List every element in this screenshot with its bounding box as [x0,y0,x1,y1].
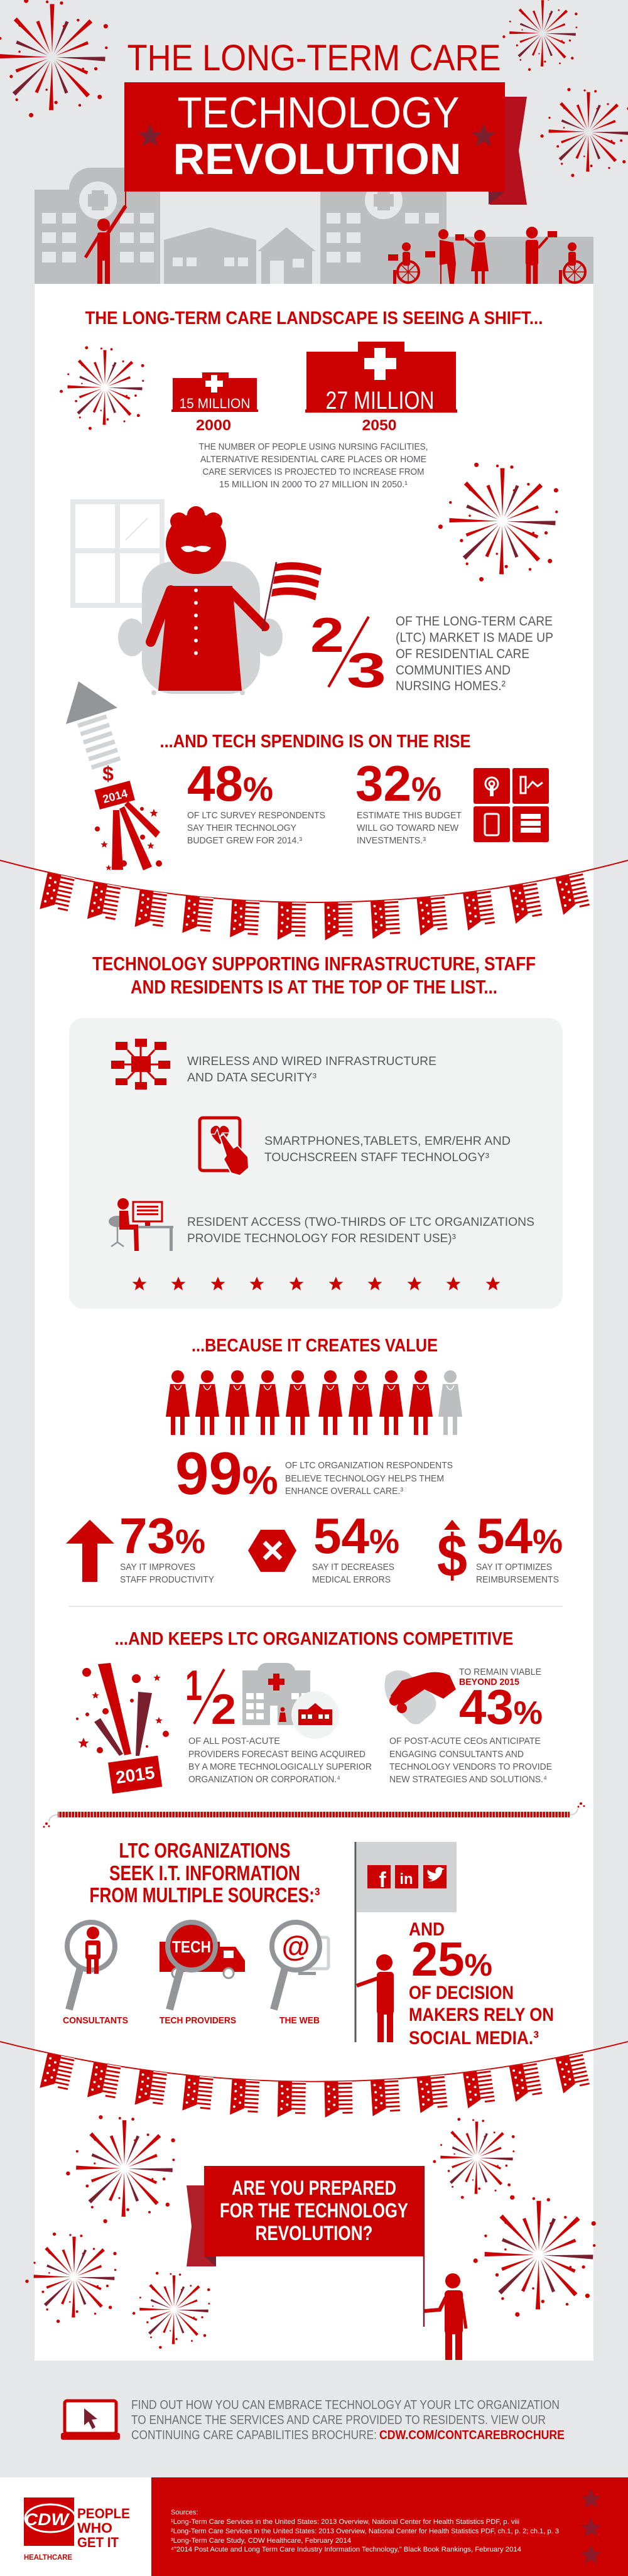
person holding closing banner [424,2166,466,2360]
stat: two thirds: 2 [310,607,344,663]
heading: seek IT information: FROM MULTIPLE SOURCES:³ [89,1883,320,1907]
labels: sources: THE WEB [279,2015,320,2026]
stat: 48%: 48% [187,755,273,811]
text: LTC market share [396,614,553,693]
closing banner tail [187,2185,216,2266]
stat: 48% [187,755,325,846]
stat: 54% reimbursements: SAY IT OPTIMIZES [476,1562,552,1572]
stat: 43% CEOs: OF POST-ACUTE CEOs ANTICIPATE [389,1736,541,1746]
stat: 48%: SAY THEIR TECHNOLOGY [187,823,296,833]
heading: landscape shift: THE LONG-TERM CARE LANDSCAPE IS SEEING A SHIFT... [85,308,543,328]
white content panel [35,284,593,2361]
bunting: top [0,860,628,940]
stat: 32%: INVESTMENTS.³ [357,836,426,846]
title banner [124,82,505,192]
text: nursing facilities projection: 15 MILLION IN 2000 TO 27 MILLION IN 2050.¹ [219,480,408,490]
text: resident access: RESIDENT ACCESS (TWO-THIRDS OF LTC ORGANIZATIONS [187,1216,534,1229]
stat: 32%: ESTIMATE THIS BUDGET [357,811,462,821]
stat: two thirds: 3 [347,642,386,698]
icon: facebook [367,1865,391,1892]
icon: laptop with cursor [61,2401,120,2440]
grandma in armchair with flag [118,506,322,695]
closing banner: are you prepared: ARE YOU PREPARED [232,2177,396,2199]
stat: 43% CEOs: NEW STRATEGIES AND SOLUTIONS.⁴ [389,1774,547,1785]
bunting: bottom [0,2042,628,2118]
stat: one half acquired: 2 [211,1686,236,1733]
text: LTC market share: OF THE LONG-TERM CARE [396,614,553,629]
residents group with flags [388,227,585,284]
heading: seek IT information [89,1839,320,1907]
firework: left of stats [60,346,144,430]
stat: 48%: OF LTC SURVEY RESPONDENTS [187,811,325,821]
stat: two thirds [310,607,386,698]
heading: competitive: ...AND KEEPS LTC ORGANIZATIONS COMPETITIVE [114,1629,514,1649]
stat: 48%: BUDGET GREW FOR 2014.³ [187,836,302,846]
stat: 27 million 2050: 2050 [362,417,397,434]
text: infrastructure [187,1055,436,1085]
icon: rocket 2014: $ [102,762,114,785]
icon: rocket 2014 [66,681,162,870]
text: smartphones: SMARTPHONES,TABLETS, EMR/EHR AND [264,1135,511,1148]
banner ribbon tail [489,97,527,205]
stat: one half acquired: OF ALL POST-ACUTE [188,1736,280,1746]
stat: 73% productivity: STAFF PRODUCTIVITY [120,1574,214,1585]
stat: 25% social media [409,1919,554,2048]
icon: network [111,1039,170,1090]
sources: Sources: [171,2509,198,2516]
logo: CDW: GET IT [77,2535,119,2550]
stat: 73% productivity: SAY IT IMPROVES [120,1562,195,1572]
heading: seek IT information: LTC ORGANIZATIONS [119,1839,290,1862]
fireworks: top [0,0,628,177]
closing banner: are you prepared: FOR THE TECHNOLOGY [220,2199,408,2222]
icons: tech investments grid [474,768,549,842]
stat: 99%: 99% [175,1440,278,1507]
icon: 2015 firework burst [76,1663,169,1794]
panel: technology priorities [69,1018,563,1309]
footer stars [581,2489,601,2564]
text: smartphones: TOUCHSCREEN STAFF TECHNOLOGY³ [264,1151,489,1164]
icon: the web magnifier [272,1922,328,2010]
icon: consultants magnifier [67,1922,115,2010]
text: LTC market share: (LTC) MARKET IS MADE UP [396,630,553,645]
firework: right of grandma [438,463,558,582]
icon: handshake [384,1670,456,1724]
window [70,499,165,608]
row of stars [133,1277,500,1291]
stat: 43% CEOs: BEYOND 2015 [459,1677,519,1687]
star right [472,124,495,146]
labels: sources: TECH PROVIDERS [160,2015,236,2026]
stat: one half acquired: PROVIDERS FORECAST BEING ACQUIRED [188,1749,365,1760]
title line 3: REVOLUTION [173,134,461,183]
closing banner: are you prepared [204,2166,425,2256]
logo: CDW: PEOPLE [77,2506,130,2521]
logo: CDW: WHO [77,2520,112,2536]
text: resident access: PROVIDE TECHNOLOGY FOR RESIDENT USE)³ [187,1232,456,1245]
text: nursing facilities projection: THE NUMBER OF PEOPLE USING NURSING FACILITIES, [198,442,428,452]
stat: 99%: BELIEVE TECHNOLOGY HELPS THEM [285,1473,444,1484]
text: LTC market share: OF RESIDENTIAL CARE [396,647,529,661]
star left [138,124,162,146]
icon: rocket 2014: 2014 [101,787,129,806]
text: LTC market share: NURSING HOMES.² [396,679,506,693]
icon: linkedin [395,1865,418,1888]
heading: infrastructure top of list: AND RESIDENTS IS AT THE TOP OF THE LIST... [131,976,497,998]
heading: creates value: ...BECAUSE IT CREATES VALUE [192,1336,438,1356]
icon: hospital with small clinic [242,1663,339,1739]
icon: linkedin: in [399,1871,413,1888]
person holding banner pole [85,192,126,284]
closing banner: are you prepared: REVOLUTION? [255,2222,373,2244]
heading: infrastructure top of list: TECHNOLOGY SUPPORTING INFRASTRUCTURE, STAFF [92,953,536,975]
stat: 54% medical errors: MEDICAL ERRORS [312,1574,391,1585]
stat: 43% CEOs [384,1667,552,1785]
stat: one half acquired [185,1662,372,1785]
call to action text [131,2398,565,2442]
stat: one half acquired: BY A MORE TECHNOLOGICALLY SUPERIOR [188,1762,372,1772]
heading: seek IT information: SEEK I.T. INFORMATION [109,1861,300,1885]
title line 2: TECHNOLOGY [177,88,460,137]
stat: 43% CEOs: 43% [459,1679,543,1734]
stat: 73% productivity: 73% [119,1508,205,1564]
stat: 99% [175,1440,453,1507]
icon: tablet with heart [200,1118,249,1176]
heading: tech spending: ...AND TECH SPENDING IS ON THE RISE [160,732,471,752]
sources: ²Long-Term Care Services in the United States: 2013 Overview, National Center for Health Statistics PDF, ch.1, p. 2; ch.1, p. 3 [171,2528,559,2535]
icon: the web magnifier: @ [282,1930,310,1962]
call to action text: FIND OUT HOW YOU CAN EMBRACE TECHNOLOGY AT YOUR LTC ORGANIZATION [131,2398,560,2412]
stat: 32%: WILL GO TOWARD NEW [357,823,458,833]
stat: one half acquired: 1 [185,1662,202,1709]
icon: resident at computer [109,1198,173,1251]
stat: 54% medical errors [248,1508,399,1585]
sources: ⁴"2014 Post Acute and Long Term Care Industry Information Technology," Black Book Rankings, February 2014 [171,2546,521,2553]
stat: 54% reimbursements: $ [437,1522,467,1589]
stat: 43% CEOs: TO REMAIN VIABLE [459,1667,541,1677]
stat: 15 million 2000: 2000 [196,417,231,434]
stat: 25% social media: AND [409,1919,445,1940]
icon: facebook: f [379,1868,386,1892]
text: nursing facilities projection [198,442,428,490]
icon: tech providers truck [160,1922,245,2010]
stat: 43% CEOs: TECHNOLOGY VENDORS TO PROVIDE [389,1762,552,1772]
stat: 32% [355,755,462,846]
heading: infrastructure top of list [92,953,536,998]
labels: sources: CONSULTANTS [63,2015,128,2026]
stat: 27 million 2050: 27 MILLION [325,387,435,414]
stat: 73% productivity [66,1508,214,1585]
stat: 54% reimbursements: 54% [477,1508,563,1564]
stat: 54% reimbursements [437,1508,563,1589]
logo: CDW [24,2498,130,2562]
call to action text: CDW.COM/CONTCAREBROCHURE [379,2428,565,2442]
logo: CDW: CDW [24,2510,70,2529]
stat: 25% social media: OF DECISION [409,1983,514,2003]
logo: CDW: HEALTHCARE [24,2553,72,2562]
stat: one half acquired: ORGANIZATION OR CORPORATION.⁴ [188,1774,340,1785]
sources: ³Long-Term Care Study, CDW Healthcare, February 2014 [171,2537,351,2545]
stat: 54% medical errors: SAY IT DECREASES [312,1562,394,1572]
stat: 25% social media: 25% [411,1933,492,1986]
labels: sources [63,2015,320,2026]
stat: 25% social media: SOCIAL MEDIA.³ [409,2028,539,2048]
stat: 99%: ENHANCE OVERALL CARE.³ [285,1486,403,1496]
text: resident access [187,1216,534,1245]
text: smartphones [264,1135,511,1164]
text: infrastructure: WIRELESS AND WIRED INFRASTRUCTURE [187,1055,436,1068]
text: LTC market share: COMMUNITIES AND [396,663,511,678]
text: nursing facilities projection: CARE SERVICES IS PROJECTED TO INCREASE FROM [202,467,425,477]
stat: 54% medical errors: 54% [313,1508,399,1564]
fuse divider [43,1802,585,1827]
icon: twitter [423,1865,447,1888]
title line 1: THE LONG-TERM CARE [127,38,501,78]
stat: 99%: OF LTC ORGANIZATION RESPONDENTS [285,1460,453,1471]
sources: ¹Long-Term Care Services in the United States: 2013 Overview, National Center for Health Statistics PDF, p. viii [171,2518,519,2526]
buildings skyline [35,168,593,284]
call to action text: TO ENHANCE THE SERVICES AND CARE PROVIDED TO RESIDENTS. VIEW OUR [131,2413,546,2427]
stat: 54% reimbursements: REIMBURSEMENTS [476,1574,559,1585]
icon: tech providers truck: TECH [172,1937,211,1956]
stat: 15 million 2000: 15 MILLION [180,396,250,411]
text: infrastructure: AND DATA SECURITY³ [187,1071,317,1085]
stat: 43% CEOs: ENGAGING CONSULTANTS AND [389,1749,524,1760]
call to action text: CONTINUING CARE CAPABILITIES BROCHURE: [131,2428,377,2442]
icon row: ten caregivers (9 red, 1 gray) [166,1370,462,1435]
stat: 15 million 2000 [171,372,258,434]
sources [171,2509,559,2553]
social media flag with person [355,1842,457,2042]
stat: 25% social media: MAKERS RELY ON [409,2005,554,2025]
stat: 32%: 32% [355,755,441,811]
icon: 2015 firework burst: 2015 [114,1763,156,1787]
footer [0,2477,628,2576]
fireworks: bottom [25,2115,596,2349]
text: nursing facilities projection: ALTERNATIVE RESIDENTIAL CARE PLACES OR HOME [200,455,426,465]
stat: 27 million 2050 [305,342,457,434]
